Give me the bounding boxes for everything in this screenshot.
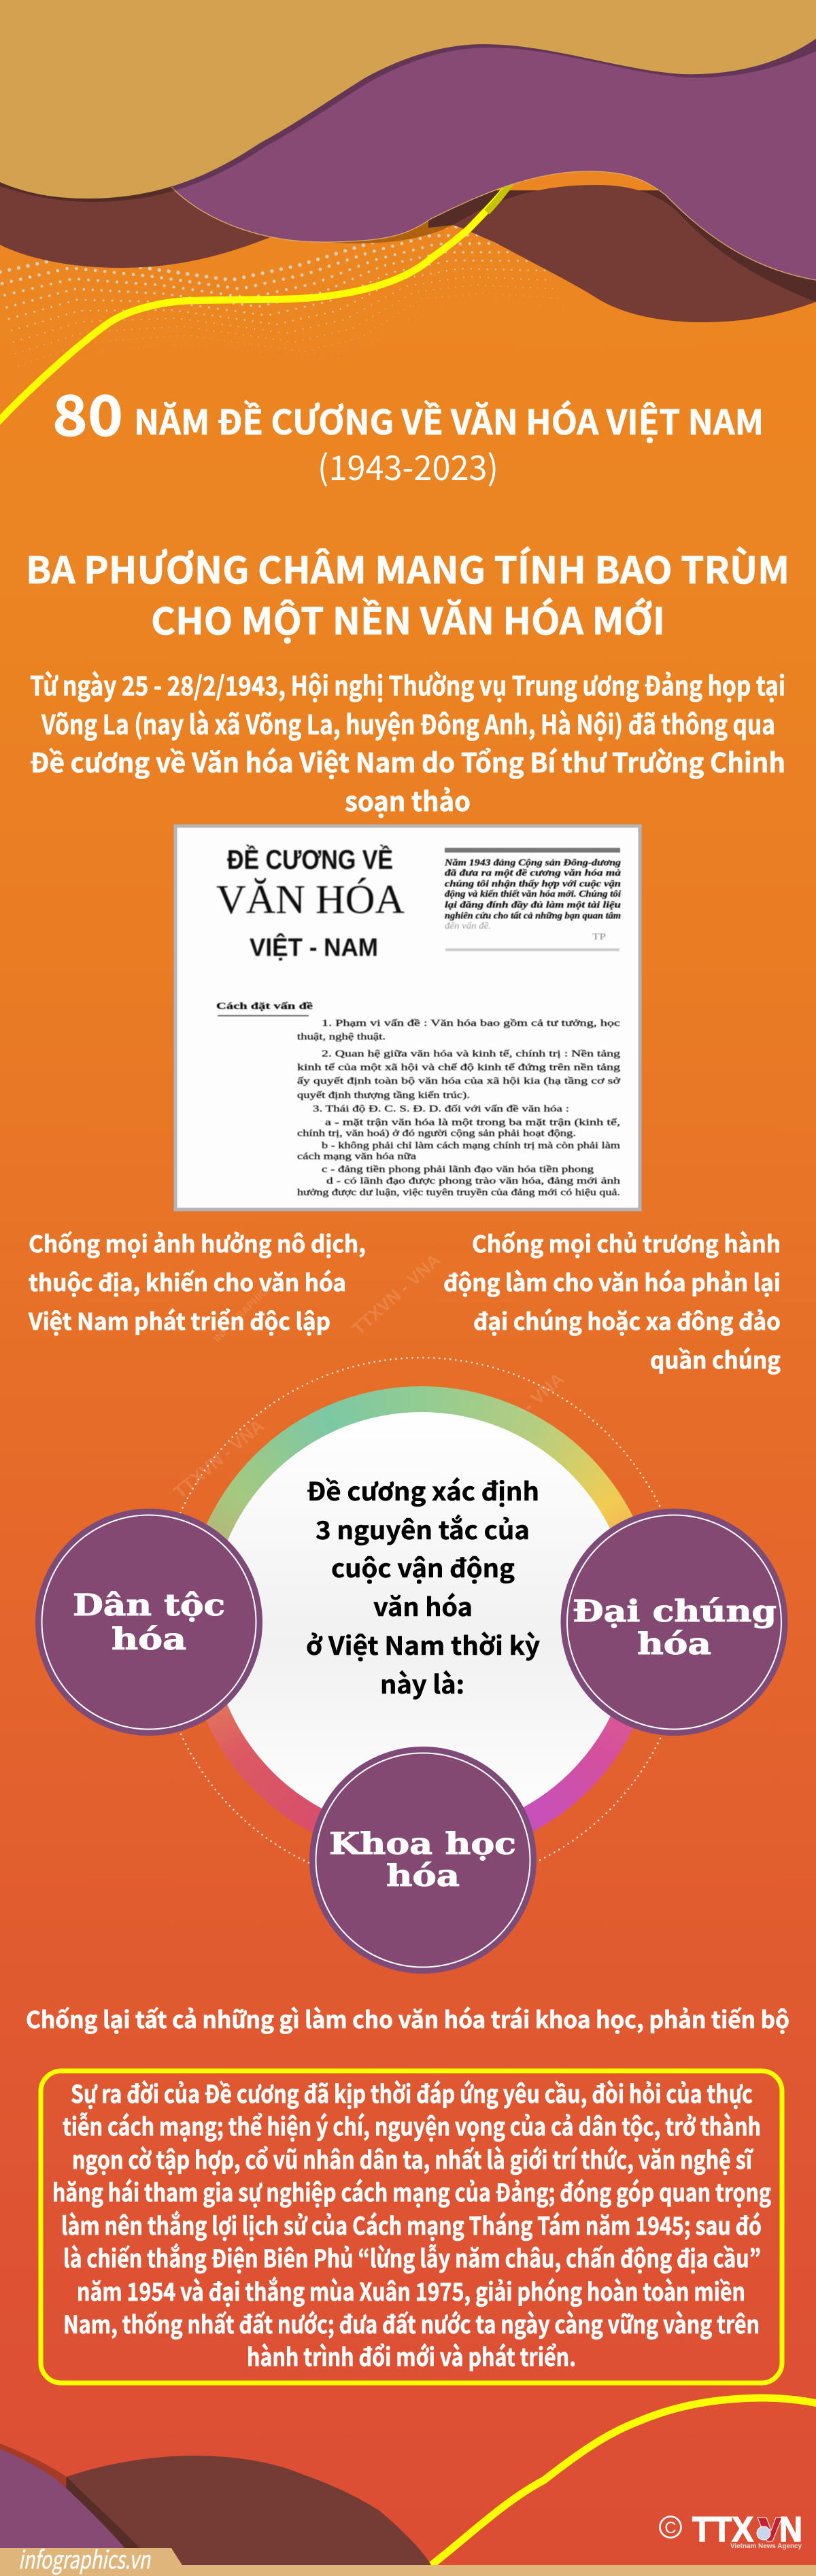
conclusion box <box>41 2071 782 2383</box>
top wave shadow <box>0 0 816 202</box>
document image <box>175 826 640 1209</box>
left principle text: Chống mọi ảnh hưởng nô dịch, <box>29 1226 366 1259</box>
title years: (1943-2023) <box>318 441 498 490</box>
right principle text: quần chúng <box>650 1342 781 1375</box>
document foreword: nghiên cứu cho tất cả những bạn quan tâm <box>445 911 621 921</box>
document body text: cách mạng văn hóa nữa <box>297 1152 417 1162</box>
document body text: quyết định thượng tầng kiến trúc). <box>297 1090 470 1101</box>
purple wave <box>171 0 816 280</box>
bottom tan bar <box>0 2548 816 2576</box>
title <box>52 371 764 452</box>
document body text <box>216 1001 621 1198</box>
document body text: a - mặt trận văn hóa là một trong ba mặt trận (kinh tế, <box>325 1118 620 1128</box>
circle: Dân tộc hóa: Dân tộc <box>73 1588 225 1623</box>
lower yellow ribbon <box>427 2398 816 2569</box>
bottom purple hill <box>0 2449 132 2556</box>
centre question text: này là: <box>380 1664 464 1701</box>
right principle text: động làm cho văn hóa phản lại <box>443 1265 781 1298</box>
document heading: ĐỀ CƯƠNG VỀ <box>227 844 393 875</box>
document body text: 1. Phạm vi vấn đề : Văn hóa bao gồm cả tư tưởng, học <box>322 1018 620 1029</box>
right principle text <box>443 1226 781 1375</box>
watermarks <box>170 1250 568 1502</box>
intro paragraph <box>30 666 785 819</box>
document body text: thuật, nghệ thuật. <box>297 1032 386 1042</box>
brown wave left <box>0 136 275 268</box>
document heading: VIỆT - NAM <box>250 933 378 961</box>
document body text: chính trị, văn hoá) ở đó người cộng sản phải hoạt động. <box>297 1129 576 1139</box>
centre question text: văn hóa <box>373 1587 473 1624</box>
olive ribbon end <box>487 180 513 212</box>
yellow ribbon <box>0 180 513 424</box>
watermarks: INFOGRAPHICS <box>211 1281 275 1345</box>
headline <box>26 540 789 645</box>
document body text: b - không phải chỉ làm cách mạng chính trị mà còn phải làm <box>322 1141 620 1151</box>
TTXVN logo <box>660 2510 802 2550</box>
document body text: 3. Thái độ Đ. C. S. Đ. D. đối với vấn đề văn hóa : <box>313 1104 569 1114</box>
circle: Đại chúng hóa: Đại chúng <box>573 1594 777 1629</box>
right principle text: đại chúng hoặc xa đông đảo <box>473 1303 781 1337</box>
watermarks: TTXVN - VNA <box>472 1369 568 1458</box>
watermarks: TTXVN - VNA <box>170 1415 268 1502</box>
TTXVN logo: N <box>779 2510 802 2549</box>
document body text: Cách đặt vấn đề <box>216 1001 313 1012</box>
intro paragraph: soạn thảo <box>345 781 471 819</box>
website label: infographics.vn <box>18 2541 152 2576</box>
document heading <box>216 844 405 961</box>
document foreword: Năm 1943 đảng Cộng sản Đông-dương <box>444 858 621 868</box>
centre question text: 3 nguyên tắc của <box>316 1510 530 1547</box>
document body text: ấy quyết định toàn bộ văn hóa của xã hội kia (hạ tầng cơ sở <box>297 1076 621 1086</box>
dotted orbit <box>156 1358 687 1888</box>
document foreword: lại đăng đính đầy đủ làm một tài liệu <box>445 900 621 910</box>
brown wave right <box>453 185 816 322</box>
TTXVN logo: Vietnam News Agency <box>730 2543 802 2550</box>
TTXVN logo: C <box>664 2519 677 2537</box>
centre question text: cuộc vận động <box>331 1548 515 1585</box>
document body text: kinh tế của một xã hội và chế độ kinh tế đứng trên nền tảng <box>297 1063 620 1073</box>
circle: Đại chúng hóa: hóa <box>637 1627 711 1662</box>
document foreword: đã đưa ra một đề cương văn hóa mà <box>445 868 621 878</box>
dark brown wave <box>428 190 816 302</box>
circle: Khoa học hóa: hóa <box>386 1859 460 1893</box>
TTXVN logo: TTX <box>692 2510 753 2549</box>
left principle text: thuộc địa, khiến cho văn hóa <box>29 1265 346 1298</box>
gradient ring <box>185 1386 658 1859</box>
translucent shadow wave <box>275 197 453 243</box>
tan top wave <box>0 0 816 199</box>
document foreword: động và kiến thiết văn hóa mới. Chúng tôi <box>445 889 621 899</box>
right principle text: Chống mọi chủ trương hành <box>472 1226 781 1259</box>
document foreword: chúng tôi nhận thấy hợp với cuộc vận <box>445 879 621 889</box>
title: 80 <box>52 371 123 452</box>
watermarks: TTXVN - VNA <box>348 1250 444 1339</box>
headline: CHO MỘT NỀN VĂN HÓA MỚI <box>151 591 665 645</box>
document foreword: TP <box>592 932 606 942</box>
centre question text <box>306 1471 540 1701</box>
conclusion text: hành trình đổi mới và phát triển. <box>247 2338 576 2373</box>
document body text: d - có lãnh đạo được phong trào văn hóa, đảng mới ảnh <box>326 1176 620 1186</box>
document foreword <box>444 848 621 951</box>
left principle text: Việt Nam phát triển độc lập <box>28 1303 330 1337</box>
headline: BA PHƯƠNG CHÂM MANG TÍNH BAO TRÙM <box>26 540 789 594</box>
circle: Đại chúng hóa <box>560 1509 787 1736</box>
bottom brown hill <box>61 2456 432 2567</box>
centre question text: Đề cương xác định <box>307 1471 539 1508</box>
document foreword: đến vấn đề. <box>445 921 491 931</box>
title: NĂM ĐỀ CƯƠNG VỀ VĂN HÓA VIỆT NAM <box>134 396 764 445</box>
document body text: 2. Quan hệ giữa văn hóa và kinh tế, chính trị : Nền tảng <box>322 1049 620 1059</box>
document heading: VĂN HÓA <box>216 877 405 922</box>
dotted wave pattern <box>0 224 568 377</box>
document body text: hưởng được dư luận, việc tuyên truyền của đảng mới có hiệu quả. <box>297 1188 620 1198</box>
circle: Khoa học hóa <box>309 1747 537 1974</box>
conclusion text <box>52 2075 771 2373</box>
circle: Dân tộc hóa <box>35 1509 262 1736</box>
white centre circle <box>211 1412 632 1834</box>
circle: Khoa học hóa: Khoa học <box>329 1827 516 1861</box>
document body text: c - đảng tiền phong phải lãnh đạo văn hóa tiền phong <box>322 1165 594 1175</box>
circle: Dân tộc hóa: hóa <box>112 1622 186 1657</box>
intro paragraph: Đề cương về Văn hóa Việt Nam do Tổng Bí thư Trường Chinh <box>30 742 785 780</box>
left principle text <box>28 1226 366 1337</box>
bottom principle text: Chống lại tất cả những gì làm cho văn hóa trái khoa học, phản tiến bộ <box>26 2002 789 2035</box>
centre question text: ở Việt Nam thời kỳ <box>306 1626 540 1662</box>
purple wave edge line <box>171 171 816 280</box>
bottom purple shadow <box>0 2443 148 2556</box>
